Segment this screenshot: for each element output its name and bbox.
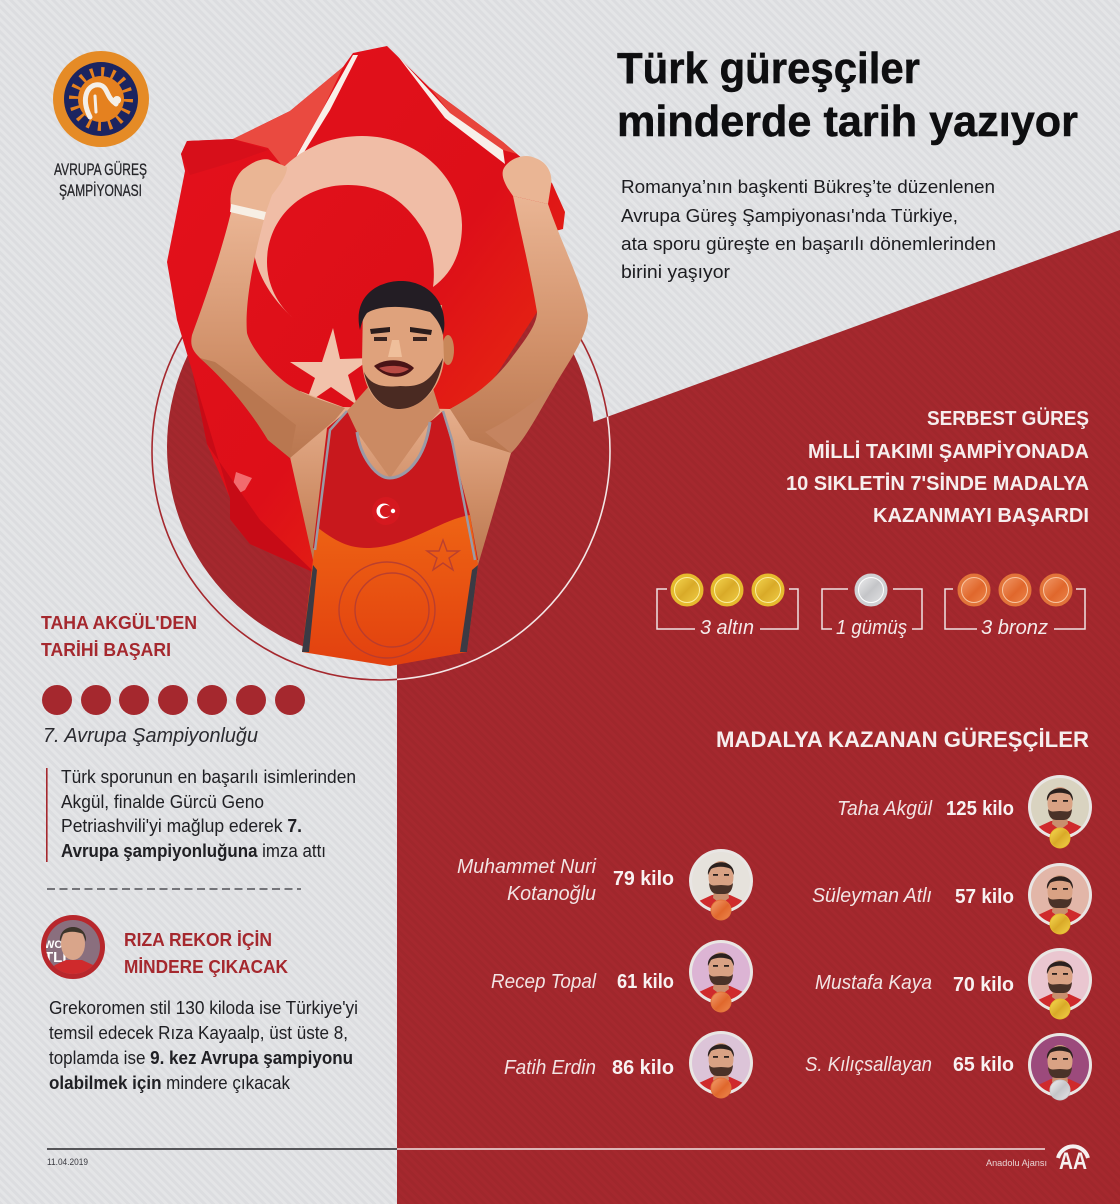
text block: Akgül: Türk sporunun en başarılı isimlerinden	[61, 767, 356, 787]
winner: Fatih Erdin: Fatih Erdin	[504, 1057, 596, 1079]
text block: Akgül: Avrupa şampiyonluğuna imza attı	[61, 841, 326, 861]
text block: Kayaalp: Grekoromen stil 130 kiloda ise Türkiye'yi	[49, 998, 358, 1018]
singlet flag badge	[372, 497, 400, 525]
heading: Taha Akgül achievement: TARİHİ BAŞARI	[41, 639, 171, 660]
right arm	[450, 156, 588, 453]
medal tally: gold	[657, 576, 798, 639]
heading: freestyle team: KAZANMAYI BAŞARDI	[873, 505, 1089, 527]
text block: Kayaalp: olabilmek için mindere çıkacak	[49, 1073, 291, 1093]
left arm	[191, 159, 345, 458]
heading: freestyle team: SERBEST GÜREŞ	[927, 407, 1089, 430]
text block: Akgül: Akgül, finalde Gürcü Geno	[61, 792, 264, 812]
heading: Rıza Kayaalp	[124, 929, 289, 977]
winner: S. Kılıçsallayan: 65 kilo	[953, 1054, 1014, 1076]
medal tally: gold: 3 altın	[700, 617, 754, 639]
medal tally: bronze: 3 bronz	[981, 617, 1048, 639]
winner: Mustafa Kaya	[815, 948, 1092, 1019]
caption: seventh European title: 7. Avrupa Şampiyonluğu	[43, 725, 258, 747]
winner: S. Kılıçsallayan: S. Kılıçsallayan	[805, 1054, 932, 1076]
flag	[167, 46, 565, 573]
winner: Muhammet Nuri Kotanoğlu: 79 kilo	[613, 868, 674, 890]
intro text: birini yaşıyor	[621, 261, 730, 282]
heading: freestyle team: 10 SIKLETİN 7'SİNDE MADALYA	[786, 472, 1089, 495]
text block: Akgül	[46, 767, 356, 862]
torso	[290, 391, 511, 565]
winner: Recep Topal: 61 kilo	[617, 971, 674, 993]
neck	[347, 385, 440, 478]
head	[359, 281, 454, 409]
winner: Süleyman Atlı	[812, 863, 1092, 934]
intro text	[621, 176, 996, 282]
heading: Taha Akgül achievement: TAHA AKGÜL'DEN	[41, 612, 197, 633]
footer	[47, 1146, 1088, 1175]
text block: Kayaalp: toplamda ise 9. kez Avrupa şampiyonu	[49, 1048, 353, 1068]
singlet emblem	[339, 540, 459, 658]
title: minderde tarih yazıyor	[617, 97, 1078, 146]
winner: Taha Akgül: Taha Akgül	[837, 798, 933, 820]
winner: Fatih Erdin: 86 kilo	[612, 1057, 674, 1079]
portrait: Rıza Kayaalp: WOR	[44, 939, 71, 951]
portrait: Rıza Kayaalp: TLI	[44, 949, 66, 966]
singlet	[302, 411, 478, 666]
medal tally: silver: 1 gümüş	[836, 617, 907, 639]
winner: Taha Akgül: 125 kilo	[946, 798, 1014, 820]
heading: freestyle team	[786, 407, 1089, 527]
winner: Muhammet Nuri Kotanoğlu: Muhammet Nuri	[457, 856, 597, 878]
winner: Fatih Erdin	[504, 1031, 753, 1098]
intro text: Avrupa Güreş Şampiyonası'nda Türkiye,	[621, 205, 958, 226]
winner: Recep Topal	[491, 940, 753, 1012]
title	[617, 44, 1078, 146]
winner: Muhammet Nuri Kotanoğlu	[457, 849, 753, 920]
footer: 11.04.2019	[47, 1157, 88, 1167]
medal tally: bronze	[945, 576, 1085, 639]
winner: Muhammet Nuri Kotanoğlu: Kotanoğlu	[507, 883, 596, 905]
winner: Recep Topal: Recep Topal	[491, 971, 597, 993]
crescent	[253, 136, 462, 318]
winner: S. Kılıçsallayan	[805, 1033, 1092, 1100]
portrait: Rıza Kayaalp	[41, 915, 105, 979]
icon: Anadolu Agency logo: AA	[1059, 1148, 1087, 1175]
heading: Taha Akgül achievement	[41, 612, 197, 660]
star	[290, 328, 372, 405]
intro text: ata sporu güreşte en başarılı dönemlerinden	[621, 233, 996, 254]
winner: Süleyman Atlı: 57 kilo	[955, 886, 1014, 908]
heading: freestyle team: MİLLİ TAKIMI ŞAMPİYONADA	[808, 440, 1089, 463]
logo: European wrestling championship	[53, 51, 149, 200]
circle outline	[151, 336, 611, 681]
heading: Rıza Kayaalp: RIZA REKOR İÇİN	[124, 929, 272, 950]
title: Türk güreşçiler	[617, 44, 920, 93]
logo caption: ŞAMPİYONASI	[59, 181, 142, 200]
winner: Mustafa Kaya: 70 kilo	[953, 974, 1014, 996]
intro text: Romanya’nın başkenti Bükreş’te düzenlenen	[621, 176, 995, 197]
text block: Kayaalp	[49, 998, 358, 1093]
footer: Anadolu Ajansı	[986, 1158, 1047, 1169]
winner: Taha Akgül	[837, 775, 1092, 848]
text block: Kayaalp: temsil edecek Rıza Kayaalp, üst üste 8,	[49, 1023, 348, 1043]
flag edge strips	[287, 55, 358, 173]
red circle behind athlete	[167, 233, 595, 661]
text block: Akgül: Petriashvili'yi mağlup ederek 7.	[61, 816, 302, 836]
medal tally: silver	[822, 576, 922, 639]
logo caption: AVRUPA GÜREŞ	[54, 160, 147, 179]
winner: Mustafa Kaya: Mustafa Kaya	[815, 972, 932, 994]
seven title dots	[42, 685, 305, 715]
background: red panel	[397, 230, 1120, 1204]
heading: medal winners: MADALYA KAZANAN GÜREŞÇİLER	[716, 727, 1089, 752]
winner: Süleyman Atlı: Süleyman Atlı	[812, 885, 932, 907]
logo caption	[54, 160, 147, 200]
photo illustration: athlete with Turkish flag	[167, 46, 588, 666]
heading: Rıza Kayaalp: MİNDERE ÇIKACAK	[124, 956, 289, 977]
